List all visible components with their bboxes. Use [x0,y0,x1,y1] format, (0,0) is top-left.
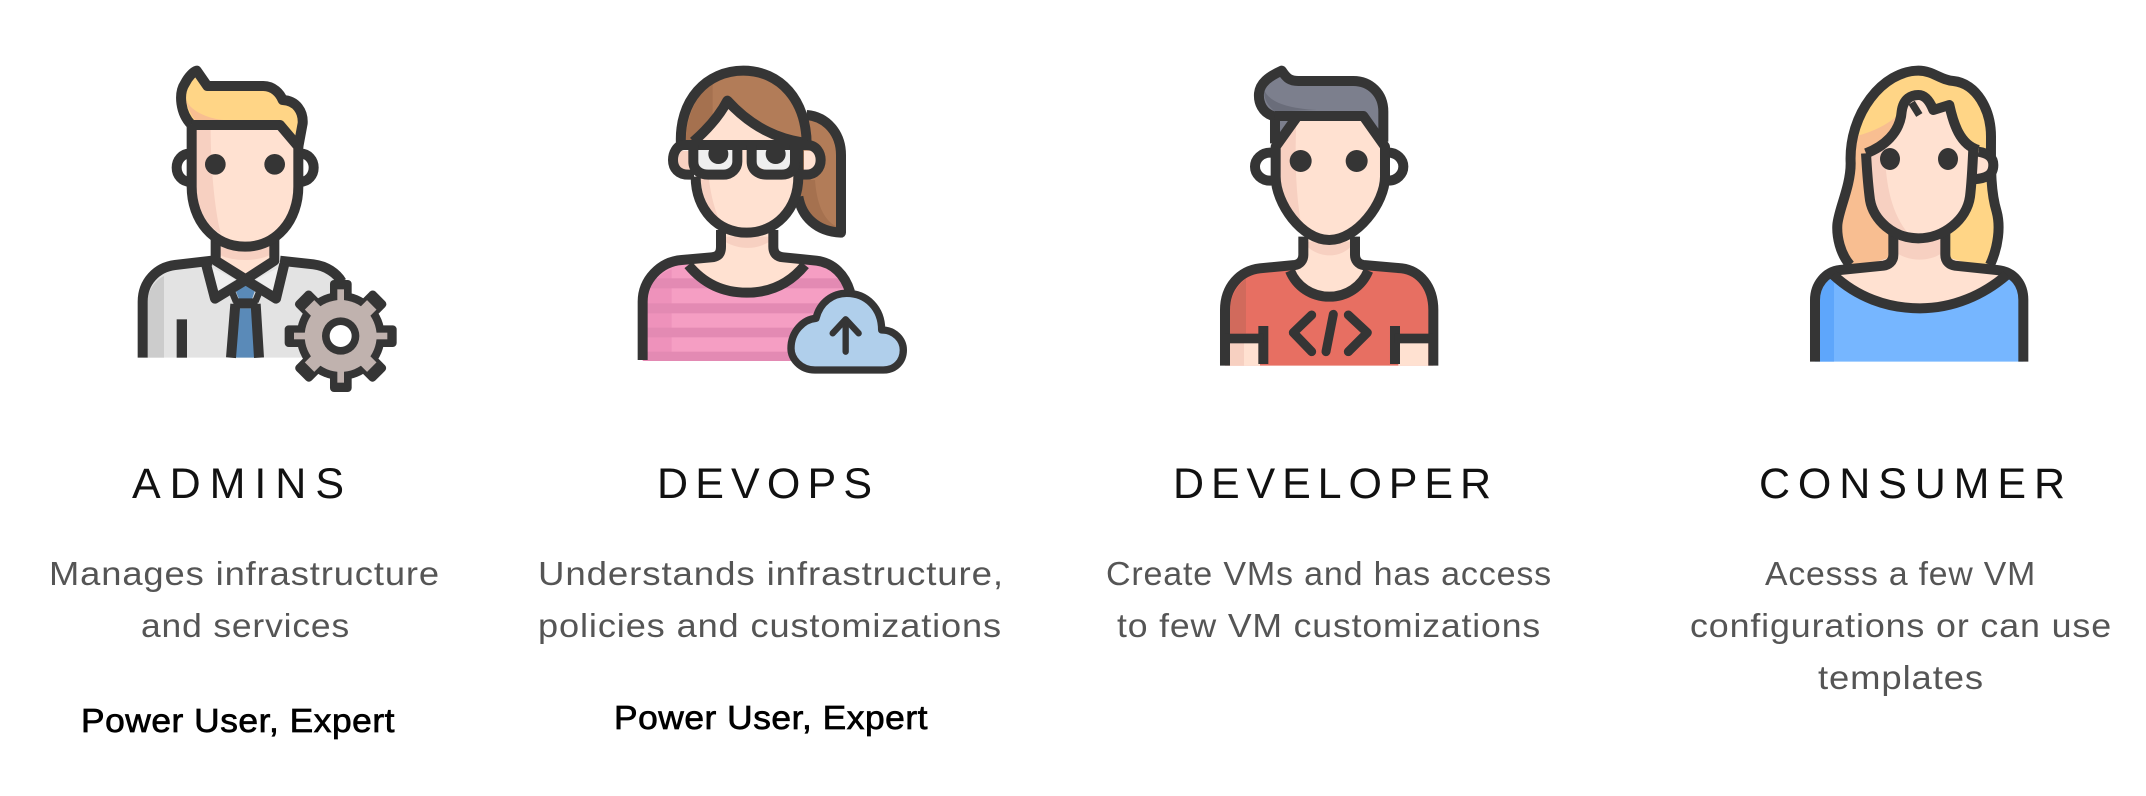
panel: admins [49,71,440,739]
description: devops [538,555,1004,644]
heading: developer: DEVELOPER [1173,460,1491,508]
heading: consumer: CONSUMER [1759,460,2065,508]
heading: admins: ADMINS [132,460,344,508]
description: admins [49,555,440,644]
icon: consumer [1815,71,2023,362]
heading: devops: DEVOPS [657,460,872,508]
icon: devops with cloud [643,71,903,370]
description: devops: policies and customizations [538,607,1002,644]
panel: consumer [1690,71,2112,696]
panel: devops [538,71,1004,736]
icon: developer with code shirt [1225,71,1433,366]
level: admins: Power User, Expert [81,702,395,739]
description: consumer [1690,555,2112,696]
icon: admin with gear [143,71,397,392]
description: developer [1106,555,1552,644]
description: consumer: configurations or can use [1690,607,2112,644]
panel: developer [1106,71,1552,644]
description: developer: to few VM customizations [1117,607,1541,644]
description: admins: Manages infrastructure [49,555,440,592]
description: consumer: Acesss a few VM [1765,555,2036,592]
description: devops: Understands infrastructure, [538,555,1004,592]
description: consumer: templates [1818,659,1984,696]
description: developer: Create VMs and has access [1106,555,1552,592]
level: devops: Power User, Expert [614,699,928,736]
description: admins: and services [141,607,350,644]
